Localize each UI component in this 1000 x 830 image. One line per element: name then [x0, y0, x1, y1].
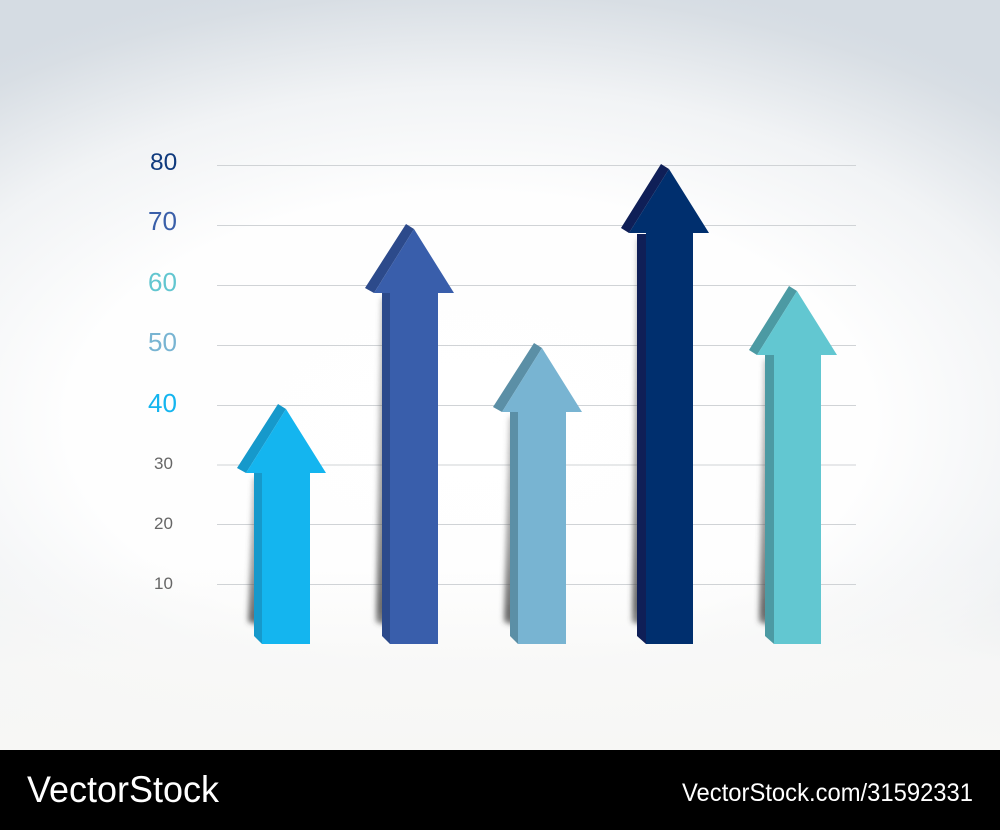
- watermark logo: VectorStock: [27, 769, 219, 810]
- arrow 3: value 50: [493, 343, 582, 644]
- axis labels: 20: [154, 514, 173, 533]
- axis labels: 10: [154, 574, 173, 593]
- axis labels: 30: [154, 454, 173, 473]
- axis labels: 50: [148, 327, 177, 357]
- axis labels: 40: [148, 388, 177, 418]
- arrow 2: value 70: [365, 224, 454, 644]
- watermark url: VectorStock.com/31592331: [682, 779, 973, 807]
- grid lines: [217, 166, 856, 584]
- axis labels: 60: [148, 267, 177, 297]
- axis labels: [148, 149, 177, 593]
- arrow 1: value 40: [237, 404, 326, 644]
- arrow 4: value 80: [621, 164, 709, 644]
- arrow 5: value 60: [749, 286, 837, 644]
- axis labels: 80: [150, 149, 177, 176]
- axis labels: 70: [148, 206, 177, 236]
- watermark bar: [0, 750, 1000, 830]
